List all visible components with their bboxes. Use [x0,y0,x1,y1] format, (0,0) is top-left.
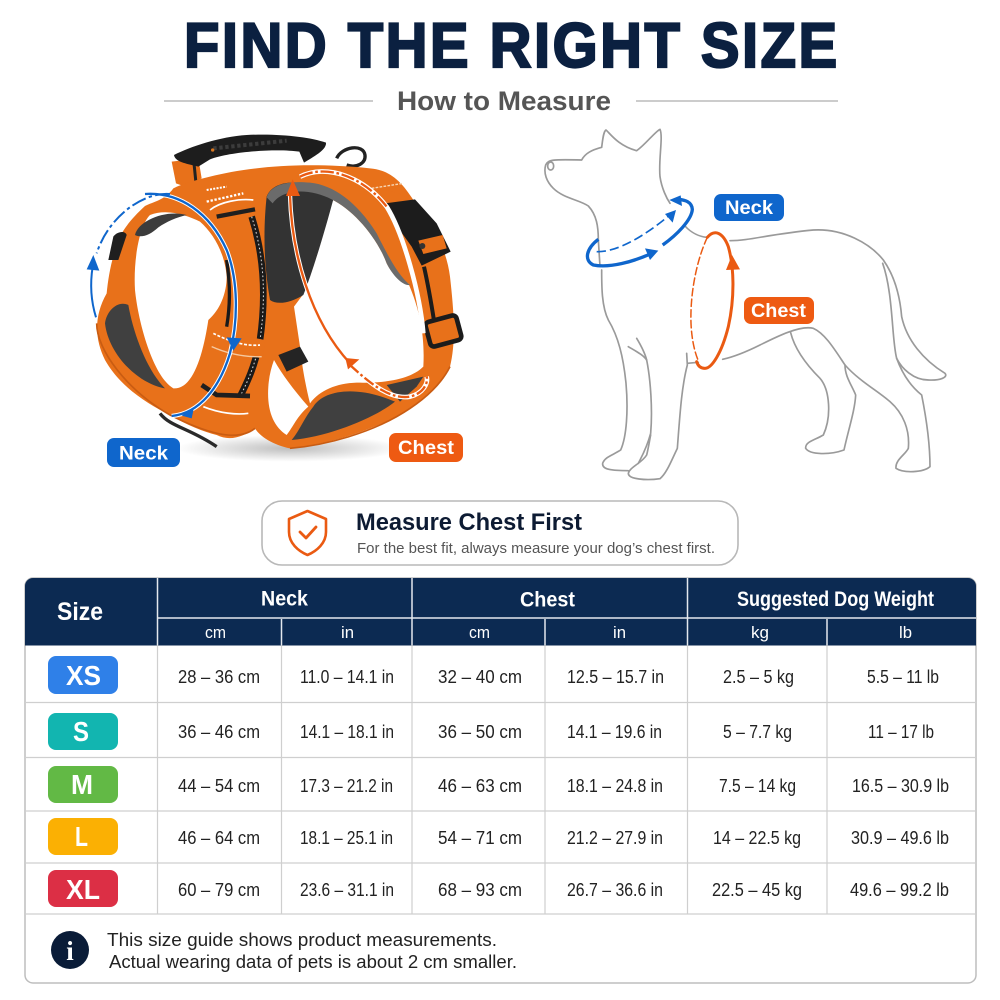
row XL: 22.5 – 45 kg [712,879,802,900]
row L: 21.2 – 27.9 in [567,827,663,848]
row M: 17.3 – 21.2 in [300,775,393,796]
row S: 5 – 7.7 kg [723,721,792,742]
title: FIND THE RIGHT SIZE [184,10,837,81]
table header: Neck [261,586,308,610]
row M: 46 – 63 cm [438,775,522,796]
row M: M [71,769,93,800]
table header: lb [899,624,912,642]
table header [25,578,976,646]
label: harness chest [389,433,463,462]
dog chest measuring ring [691,233,733,368]
row S: 14.1 – 19.6 in [567,721,662,742]
row L: L [75,821,88,852]
row XL: 60 – 79 cm [178,879,260,900]
left small slider [108,232,127,260]
row XL: 26.7 – 36.6 in [567,879,663,900]
chest arrowheads [286,179,359,369]
table header: Chest [520,588,575,612]
row XS: 32 – 40 cm [438,666,522,687]
row XS: 5.5 – 11 lb [867,666,939,687]
D ring [337,148,365,166]
row XS: XS [66,660,101,691]
central straps [240,217,263,397]
harness body [97,165,454,448]
dog head and front [545,129,670,240]
table header: in [613,624,626,642]
table frame [25,578,976,983]
row XS: 11.0 – 14.1 in [300,666,394,687]
label: dog chest: Chest [751,301,807,322]
chest side buckle [385,199,451,266]
label: harness neck: Neck [119,444,168,464]
row L [48,818,949,855]
neck arrowheads [87,255,242,418]
table header: kg [751,624,769,642]
row M: 44 – 54 cm [178,775,260,796]
callout: measure chest first [262,501,738,565]
row L: 46 – 64 cm [178,827,260,848]
row L: 30.9 – 49.6 lb [851,827,949,848]
label: dog neck [714,194,784,221]
icon: info: i [66,936,74,966]
row XL: 68 – 93 cm [438,879,522,900]
dog back and tail [685,226,707,237]
handle [174,135,326,167]
lower strap buckle [278,347,308,372]
icon: shield with check [289,511,326,555]
handle loop [172,158,202,187]
row S: 36 – 46 cm [178,721,260,742]
row XL: 23.6 – 31.1 in [300,879,394,900]
row S: 14.1 – 18.1 in [300,721,394,742]
chest measuring arrow [290,171,427,397]
row XS [48,656,939,694]
row XS: 12.5 – 15.7 in [567,666,664,687]
table header: in [341,624,354,642]
row XL: XL [66,874,100,905]
dog neck measuring ring [587,199,692,266]
size table [25,578,976,983]
darker edge [97,323,255,435]
row XS: 28 – 36 cm [178,666,260,687]
row M: 16.5 – 30.9 lb [852,775,949,796]
lower slider [425,315,462,347]
table header: cm [469,624,490,642]
row S: 11 – 17 lb [868,721,934,742]
row L: 18.1 – 25.1 in [300,827,393,848]
footnote text [107,930,517,972]
row S: 36 – 50 cm [438,721,522,742]
label: harness neck [107,438,180,467]
footnote text: This size guide shows product measurements. [107,930,497,950]
table header: Suggested Dog Weight [737,587,934,611]
right strap [424,267,435,327]
label: harness chest: Chest [398,438,455,459]
row XL: 49.6 – 99.2 lb [850,879,949,900]
dog outline illustration [545,129,946,480]
dog neck arrowheads [645,195,682,260]
ground shadow [177,435,403,462]
subheading: how to measure: How to Measure [397,86,611,116]
table header: Size [57,598,103,626]
row XS: 2.5 – 5 kg [723,666,794,687]
icon: info [51,931,89,969]
harness illustration [87,135,462,462]
neck measuring arrow [91,194,236,416]
table header: cm [205,624,226,642]
mesh panels [135,213,187,236]
row S [48,713,934,750]
row XL [48,870,949,907]
bottom ring [160,413,217,447]
row M: 7.5 – 14 kg [719,775,796,796]
label: dog neck: Neck [725,198,773,219]
footnote text: Actual wearing data of pets is about 2 cm smaller. [109,952,517,972]
callout text: For the best fit, always measure your dog’s chest first. [357,541,715,557]
row M [48,766,949,803]
dog chest arrowhead [726,255,740,270]
dog rear legs [723,328,930,472]
callout heading: Measure Chest First [356,509,582,536]
label: dog chest [744,297,814,324]
row S: S [73,716,89,747]
row L: 54 – 71 cm [438,827,522,848]
row M: 18.1 – 24.8 in [567,775,663,796]
row L: 14 – 22.5 kg [713,827,801,848]
